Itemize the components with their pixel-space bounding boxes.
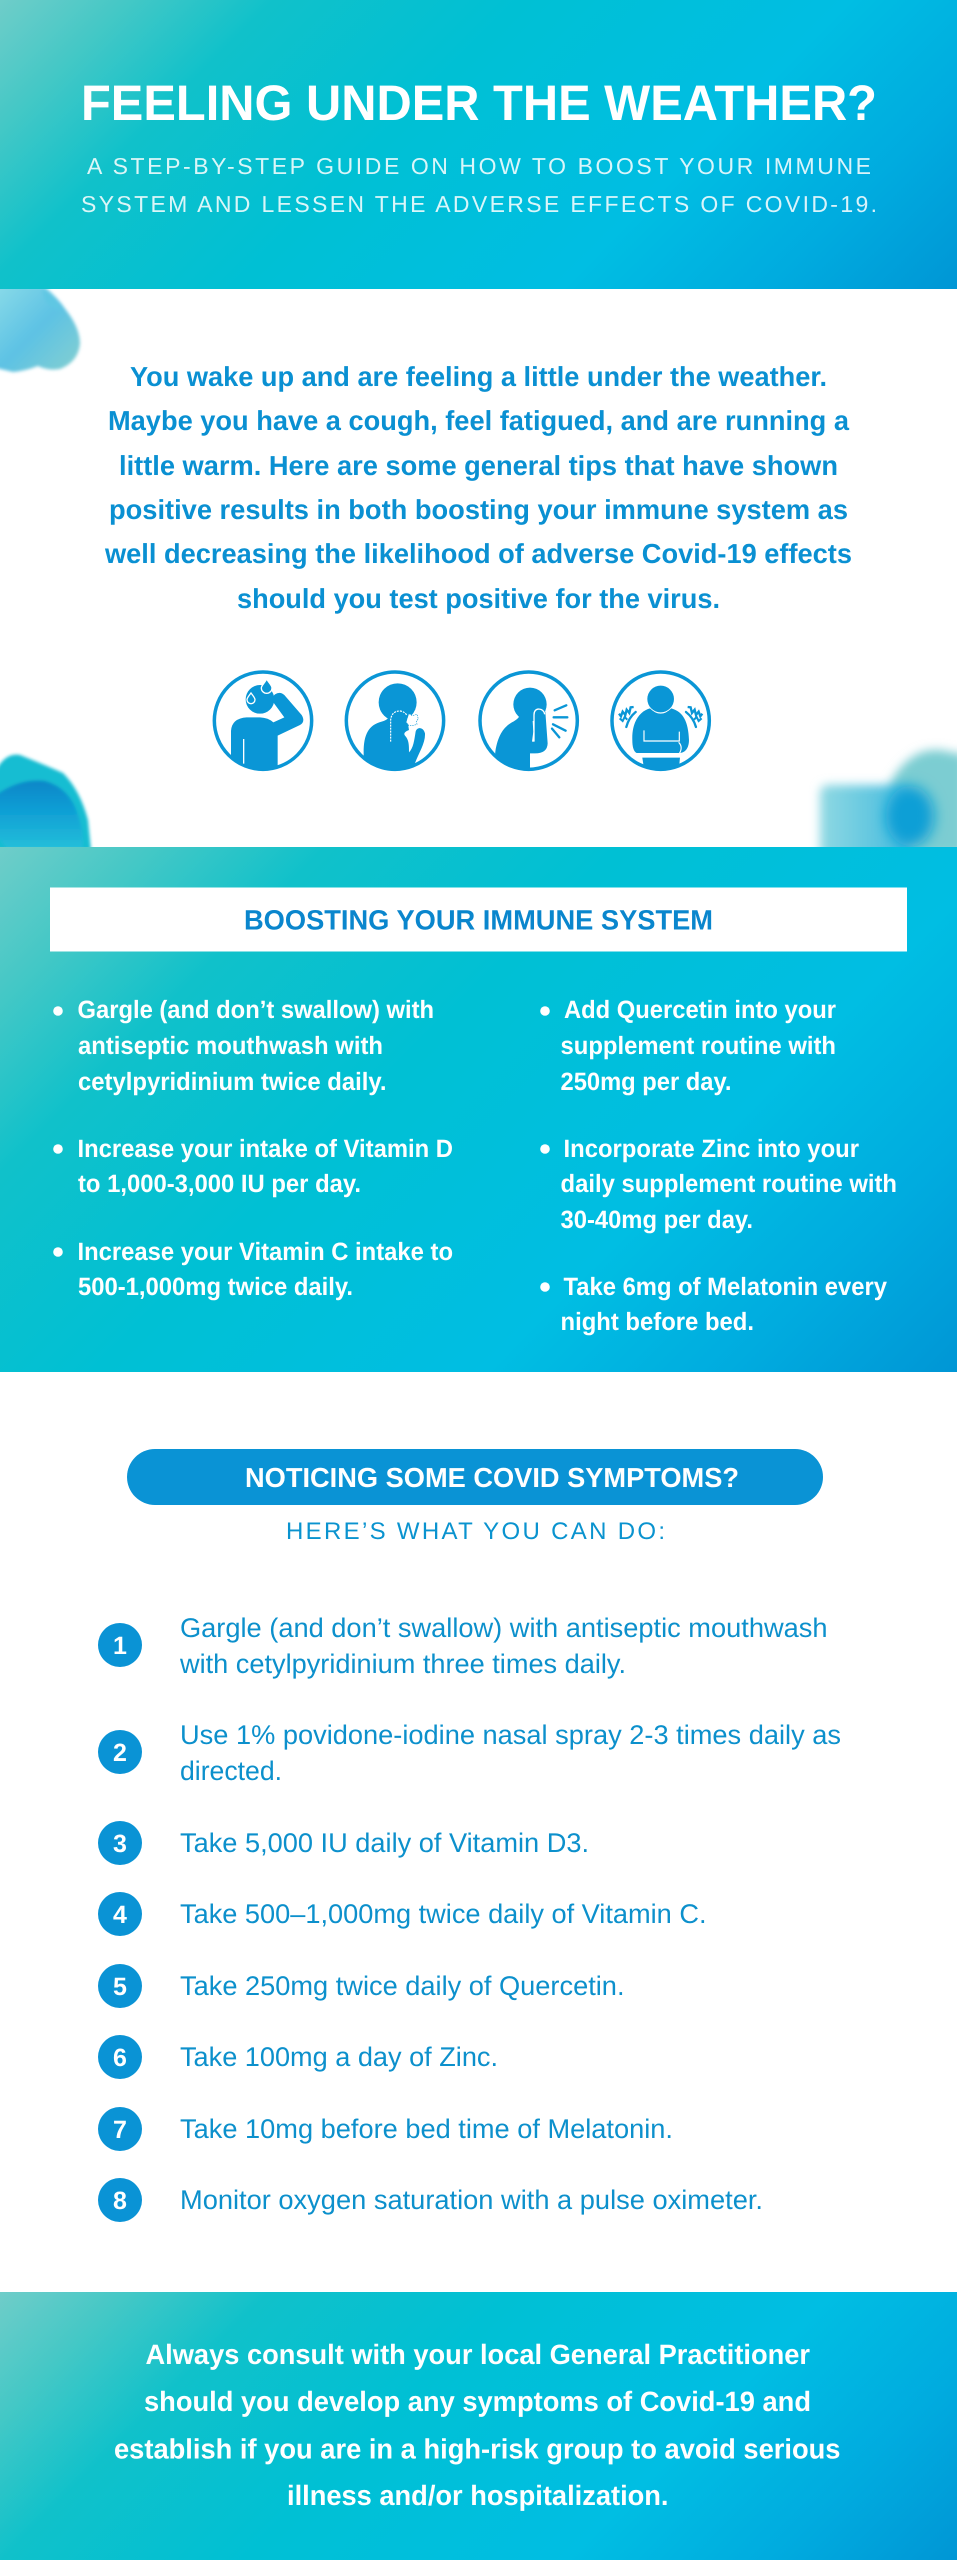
bullet list: left column: Increase your intake of Vitamin D <box>78 1135 453 1163</box>
step 6: 6 <box>113 2044 127 2072</box>
panel: header <box>0 0 957 289</box>
bullet list: right column: Take 6mg of Melatonin every <box>564 1273 887 1301</box>
intro text: well decreasing the likelihood of adverse Covid-19 effects <box>104 538 852 569</box>
subtitle: A STEP-BY-STEP GUIDE ON HOW TO BOOST YOUR IMMUNE <box>87 153 871 179</box>
subtitle: SYSTEM AND LESSEN THE ADVERSE EFFECTS OF COVID-19. <box>81 191 877 217</box>
step 8: Monitor oxygen saturation with a pulse oximeter. <box>180 2185 763 2215</box>
bullet list: right column <box>540 996 897 1336</box>
icon: fever, wiping sweat <box>214 672 312 775</box>
footer text <box>114 2339 840 2511</box>
heading pill: noticing some covid symptoms: NOTICING SOME COVID SYMPTOMS? <box>245 1462 739 1493</box>
title: FEELING UNDER THE WEATHER? <box>81 75 877 131</box>
bullet list: right column: supplement routine with <box>560 1032 836 1060</box>
step 2: Use 1% povidone-iodine nasal spray 2-3 times daily as <box>180 1720 841 1750</box>
step 1: with cetylpyridinium three times daily. <box>179 1649 626 1679</box>
step 7: Take 10mg before bed time of Melatonin. <box>180 2114 673 2144</box>
step 6: Take 100mg a day of Zinc. <box>180 2042 498 2072</box>
footer text: should you develop any symptoms of Covid-19 and <box>144 2386 811 2417</box>
step 1: Gargle (and don’t swallow) with antiseptic mouthwash <box>180 1613 828 1643</box>
intro text: little warm. Here are some general tips that have shown <box>119 450 838 481</box>
step 4 <box>98 1892 706 1936</box>
step 5: 5 <box>113 1973 127 2001</box>
step 7 <box>98 2107 673 2151</box>
bullet list: left column: Gargle (and don’t swallow) with <box>78 996 434 1024</box>
footer text: illness and/or hospitalization. <box>287 2480 668 2511</box>
intro text <box>104 361 852 614</box>
footer text: Always consult with your local General Practitioner <box>146 2339 810 2370</box>
bullet list: left column: 500-1,000mg twice daily. <box>78 1273 353 1301</box>
step 4: Take 500–1,000mg twice daily of Vitamin C. <box>180 1899 706 1929</box>
step 2: directed. <box>180 1756 282 1786</box>
bullet list: left column <box>53 996 453 1301</box>
icon: sneezing or sore throat <box>346 672 444 775</box>
bullet list: right column: 30-40mg per day. <box>560 1206 753 1234</box>
step 3 <box>98 1821 589 1865</box>
bullet list: right column: Incorporate Zinc into your <box>564 1135 859 1163</box>
bullet list: right column: daily supplement routine with <box>560 1170 897 1198</box>
bullet list: right column: 250mg per day. <box>560 1068 732 1096</box>
step 5 <box>98 1964 624 2008</box>
step 1: 1 <box>113 1632 127 1660</box>
bullet list: left column: cetylpyridinium twice daily. <box>78 1068 386 1096</box>
heading bar <box>50 888 907 952</box>
intro text: should you test positive for the virus. <box>237 583 720 614</box>
step 8: 8 <box>113 2187 127 2215</box>
icon: coughing <box>480 672 577 775</box>
footer text: establish if you are in a high-risk group to avoid serious <box>114 2434 840 2464</box>
bullet list: right column: Add Quercetin into your <box>564 996 836 1024</box>
panel: boosting your immune system <box>0 847 957 1372</box>
bullet list: left column: Increase your Vitamin C intake to <box>78 1238 453 1266</box>
step 5: Take 250mg twice daily of Quercetin. <box>180 1971 624 2001</box>
heading bar: BOOSTING YOUR IMMUNE SYSTEM <box>244 904 713 936</box>
bullet list: right column: night before bed. <box>560 1308 754 1336</box>
step 2 <box>98 1720 841 1786</box>
step 3: 3 <box>113 1830 127 1858</box>
decorative blobs <box>0 285 957 860</box>
heading pill: noticing some covid symptoms <box>127 1449 823 1505</box>
step 3: Take 5,000 IU daily of Vitamin D3. <box>180 1828 589 1858</box>
intro text: positive results in both boosting your immune system as <box>109 494 848 525</box>
step 4: 4 <box>113 1901 127 1929</box>
intro text: Maybe you have a cough, feel fatigued, and are running a <box>108 405 850 436</box>
subtitle <box>81 153 877 217</box>
numbered steps <box>98 1613 841 2222</box>
panel: footer <box>0 2292 957 2560</box>
step 6 <box>98 2035 498 2079</box>
step 1 <box>98 1613 828 1679</box>
bullet list: left column: to 1,000-3,000 IU per day. <box>78 1170 361 1198</box>
step 7: 7 <box>113 2116 127 2144</box>
icon: body aches and chills <box>612 672 709 775</box>
subheading: HERE’S WHAT YOU CAN DO: <box>286 1518 665 1545</box>
intro text: You wake up and are feeling a little under the weather. <box>130 361 827 392</box>
step 2: 2 <box>113 1739 127 1767</box>
step 8 <box>98 2178 763 2222</box>
bullet list: left column: antiseptic mouthwash with <box>78 1032 383 1060</box>
